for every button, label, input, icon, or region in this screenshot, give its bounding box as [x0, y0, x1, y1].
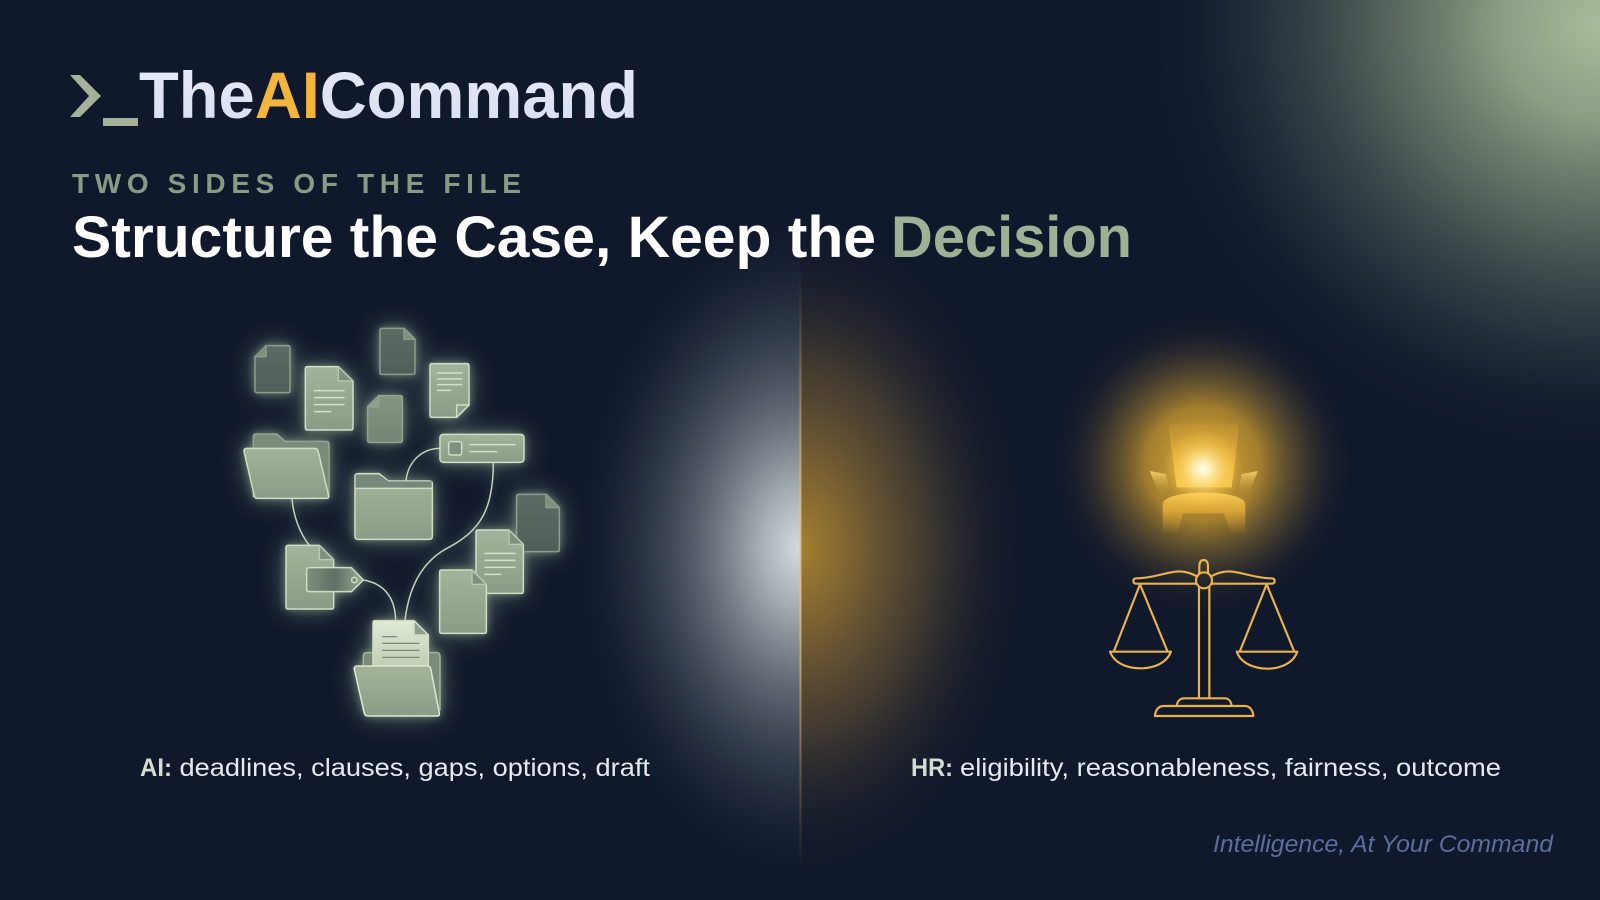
icon: glowing chair: [1053, 314, 1353, 614]
document blank right: [440, 570, 486, 633]
final folder back: [363, 653, 440, 710]
chair shape: [1150, 423, 1258, 534]
chair halo: [1053, 314, 1353, 614]
center divider: [800, 270, 802, 870]
document with lines right: [476, 530, 523, 593]
scale pivot: [1196, 572, 1212, 588]
scale beam: [1133, 571, 1275, 584]
title white part: Structure the Case, Keep the: [72, 205, 876, 270]
caption: AI: deadlines, clauses, gaps, options, draft: [180, 754, 650, 782]
scale base: [1155, 698, 1253, 716]
caption: HR: eligibility, reasonableness, fairness, outcome: [960, 754, 1501, 782]
logo wordmark: TheAICommand: [139, 58, 638, 132]
chair back: [1169, 423, 1239, 487]
top-right sage glow: [1100, 0, 1600, 480]
document dark right: [517, 494, 559, 552]
label card: [440, 434, 524, 462]
chair seat: [1163, 493, 1245, 534]
tag: [307, 568, 363, 592]
chair arms: [1150, 471, 1258, 493]
caption: HR: HR:: [911, 754, 953, 782]
connector lines: [292, 448, 493, 620]
illustration: AI organised files: [244, 328, 559, 716]
folder centre: [355, 474, 432, 539]
final document: [373, 621, 428, 668]
logo: [70, 58, 638, 132]
final folder front: [354, 666, 439, 716]
title: [72, 205, 1132, 270]
document curled corner: [430, 364, 469, 417]
icon: scales of justice: [1110, 560, 1297, 716]
chair core light: [1163, 429, 1243, 509]
open folder upper left: [244, 434, 329, 498]
document with tag: page: [286, 545, 334, 609]
document medium: [368, 396, 402, 442]
caption: AI: AI:: [140, 754, 172, 782]
left pan: [1110, 584, 1171, 668]
document dark top: [380, 328, 415, 374]
tagline: Intelligence, At Your Command: [1213, 831, 1554, 858]
title accent word: Decision: [891, 205, 1132, 270]
right pan: [1237, 584, 1297, 669]
logo prompt icon: [70, 75, 138, 126]
right amber light glow: [800, 272, 991, 824]
document dark top-left: [255, 346, 290, 393]
eyebrow: TWO SIDES OF THE FILE: [72, 168, 521, 199]
scale post: [1199, 560, 1209, 698]
document with lines upper left: [305, 367, 353, 430]
left white light glow: [606, 265, 800, 830]
